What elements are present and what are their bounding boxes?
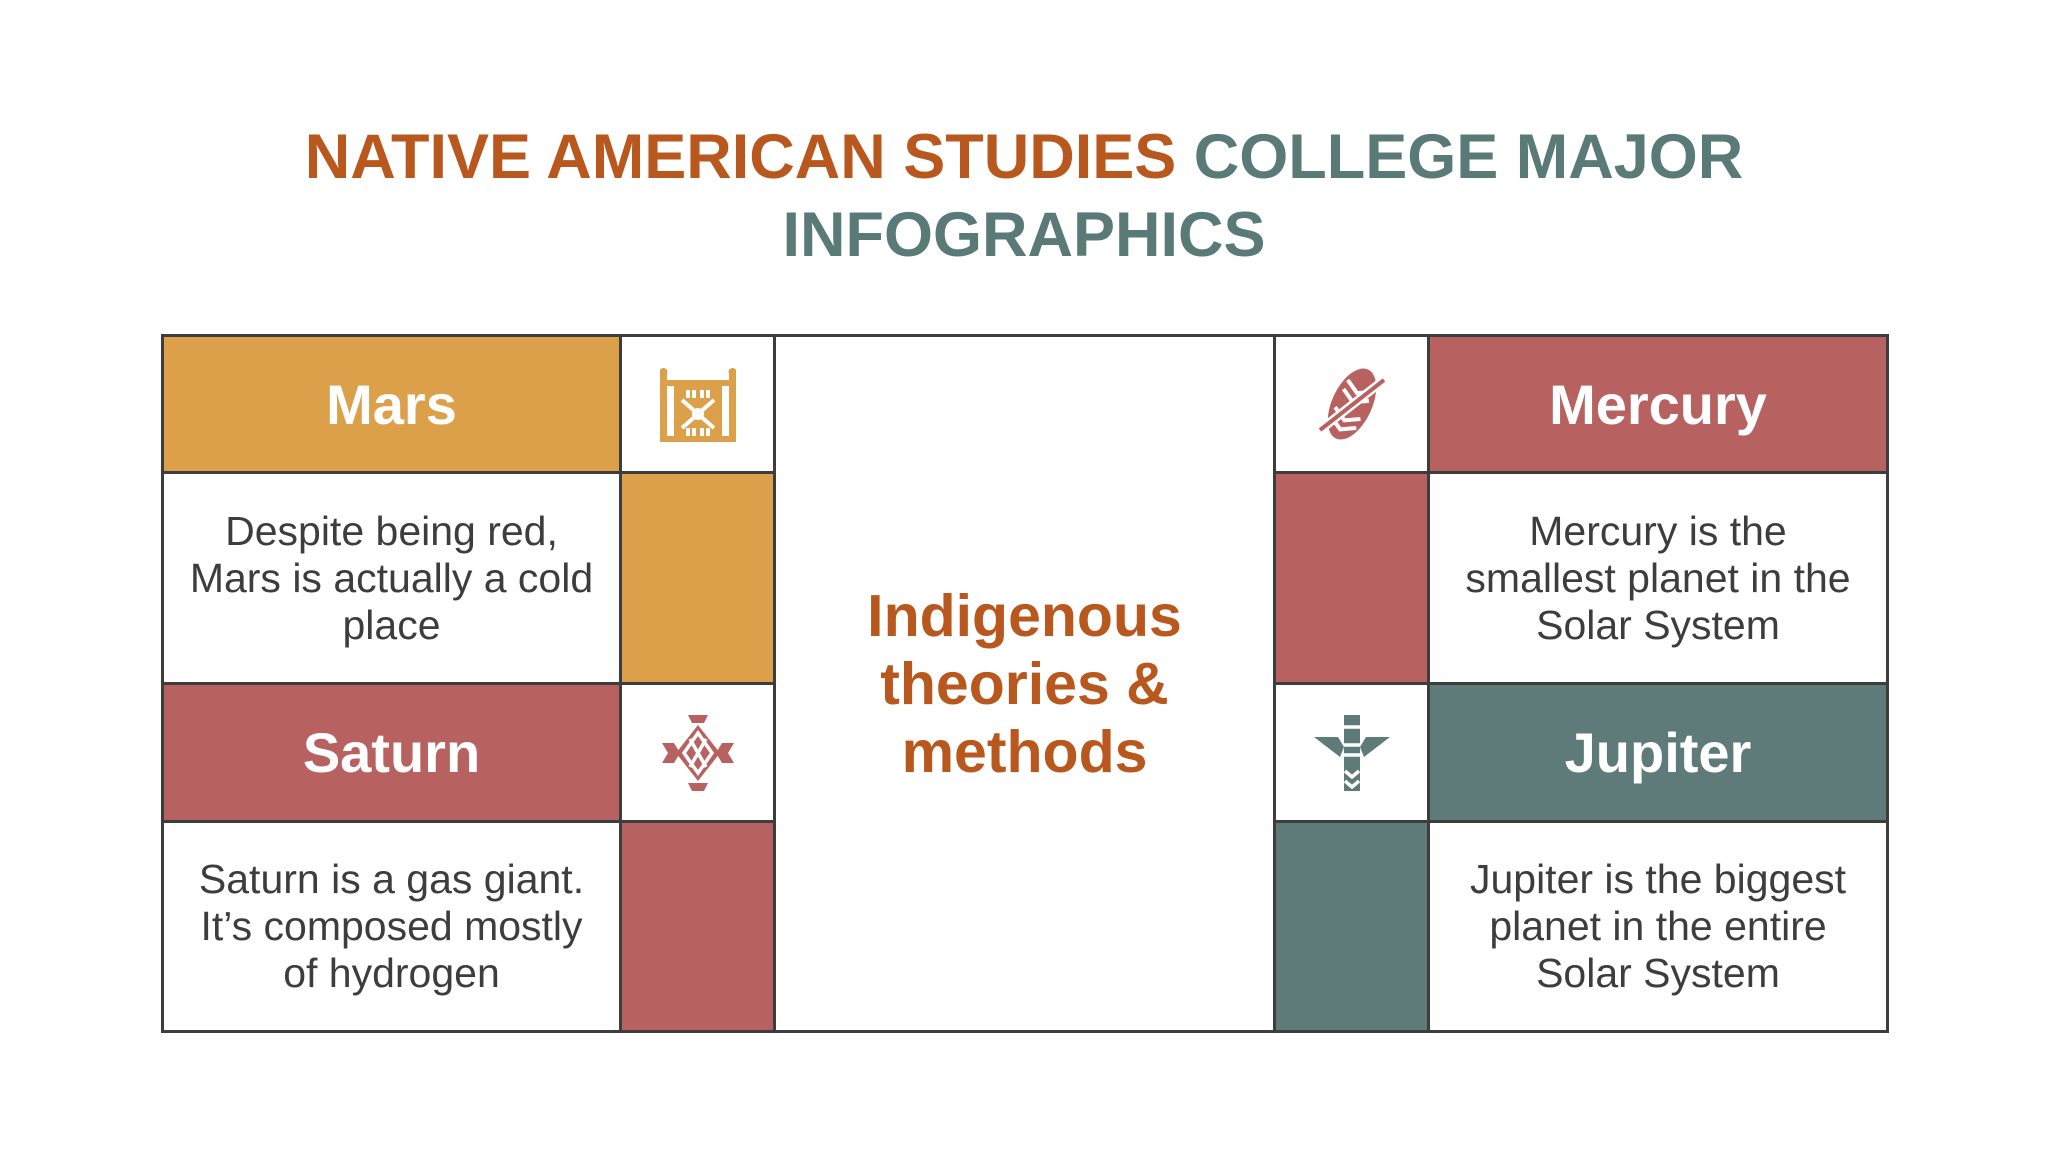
icon: diamond star: [619, 682, 776, 823]
title: [305, 122, 1743, 270]
panel: mercury text: Mercury is the: [1529, 508, 1787, 554]
title: NATIVE AMERICAN STUDIES COLLEGE MAJOR: [305, 122, 1743, 192]
panel: mars text: Despite being red,: [225, 508, 558, 554]
panel: mercury heading: Mercury: [1549, 372, 1767, 436]
panel: mars text: Mars is actually a cold: [190, 554, 593, 600]
panel: jupiter text: Solar System: [1536, 950, 1780, 996]
panel: center: [773, 334, 1276, 1033]
icon: totem: [1273, 682, 1430, 823]
panel: saturn text: of hydrogen: [283, 950, 500, 996]
panel: saturn heading: Saturn: [303, 721, 480, 784]
panel: mars text: [161, 471, 622, 685]
title: INFOGRAPHICS: [782, 200, 1266, 270]
panel: saturn heading: [161, 682, 622, 823]
panel: jupiter text: Jupiter is the biggest: [1470, 856, 1846, 902]
panel: saturn text: [161, 820, 622, 1033]
panel: jupiter heading: Jupiter: [1565, 721, 1751, 784]
panel: mercury text: [1427, 471, 1889, 685]
panel: saturn text: It’s composed mostly: [200, 903, 583, 949]
panel: mars text: place: [342, 602, 440, 648]
panel: mercury text: Solar System: [1536, 602, 1780, 648]
panel: jupiter text: [1427, 820, 1889, 1033]
panel: center: methods: [902, 718, 1147, 784]
panel: saturn text: Saturn is a gas giant.: [199, 856, 584, 902]
panel: mercury heading: [1427, 334, 1889, 474]
panel: center: Indigenous: [867, 582, 1182, 648]
panel: mercury color block: [1273, 471, 1430, 685]
icon: loom: [619, 334, 776, 474]
panel: saturn color block: [619, 820, 776, 1033]
panel: center: theories &: [880, 650, 1169, 716]
icon: feather shield: [1273, 334, 1430, 474]
panel: jupiter heading: [1427, 682, 1889, 823]
panel: jupiter color block: [1273, 820, 1430, 1033]
panel: mars color block: [619, 471, 776, 685]
panel: mercury text: smallest planet in the: [1465, 554, 1851, 600]
panel: mars heading: Mars: [326, 372, 457, 436]
panel: jupiter text: planet in the entire: [1489, 903, 1827, 949]
panel: mars heading: [161, 334, 622, 474]
